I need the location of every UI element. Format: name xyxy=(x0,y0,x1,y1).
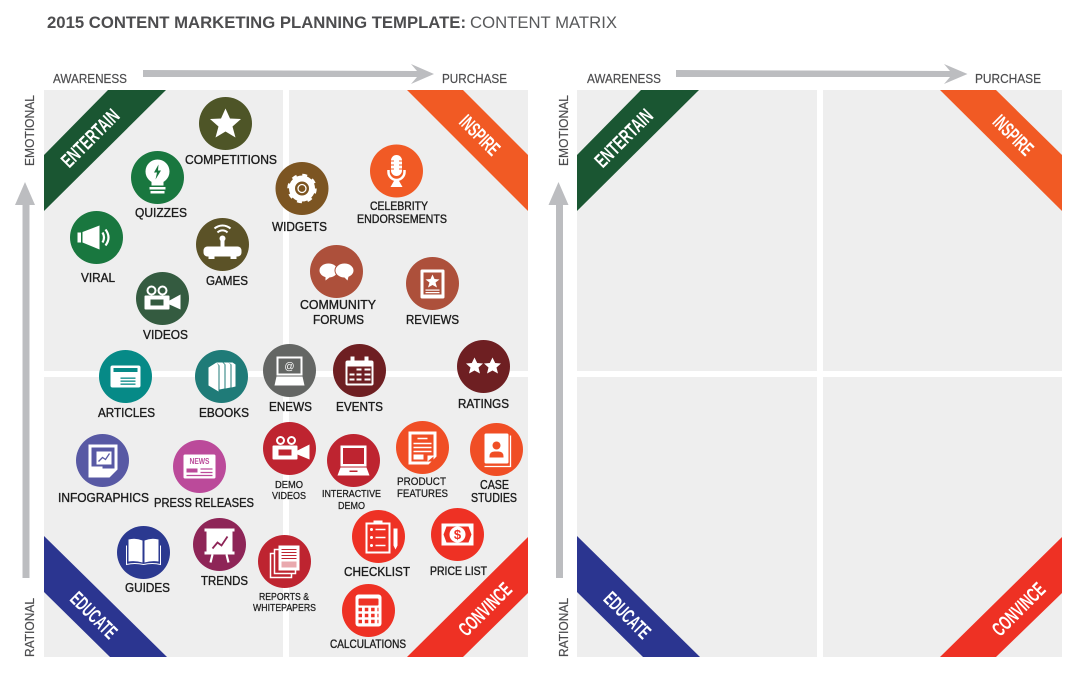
item: ratings xyxy=(457,340,510,411)
arrow: rational to emotional xyxy=(548,182,568,578)
icon: case file with person xyxy=(470,423,523,476)
icon: laptop xyxy=(327,434,380,487)
axis label: purchase: PURCHASE xyxy=(442,72,507,86)
ribbon: educate xyxy=(44,536,167,657)
ribbon: inspire xyxy=(940,90,1062,211)
ribbon: convince: CONVINCE xyxy=(988,579,1050,641)
label: DEMO xyxy=(275,480,303,491)
ribbon: inspire: INSPIRE xyxy=(988,111,1037,161)
label: DEMO xyxy=(338,501,365,512)
item: ebooks xyxy=(195,350,249,420)
quadrant: convince background xyxy=(289,377,528,657)
ribbon: entertain xyxy=(577,90,699,211)
label: COMPETITIONS xyxy=(185,153,277,167)
title: 2015 CONTENT MARKETING PLANNING TEMPLATE: xyxy=(47,13,466,32)
label: EVENTS xyxy=(336,400,383,414)
ribbon: educate xyxy=(577,536,700,657)
item: guides xyxy=(117,526,170,595)
icon: open book xyxy=(117,526,170,579)
icon: presentation board xyxy=(193,518,246,571)
ribbon: entertain xyxy=(44,90,166,211)
label: CALCULATIONS xyxy=(330,639,406,651)
quadrant: educate background xyxy=(44,377,283,657)
item: trends xyxy=(193,518,248,588)
ribbon: convince: CONVINCE xyxy=(455,579,517,641)
label xyxy=(253,592,316,614)
ribbon: convince xyxy=(407,537,528,657)
label xyxy=(397,476,448,500)
panel: blank content matrix xyxy=(548,64,1062,657)
ribbon: convince xyxy=(940,537,1062,657)
item: articles xyxy=(98,350,155,420)
quadrant: educate background xyxy=(577,377,817,657)
icon: tablet with star xyxy=(406,257,459,310)
quadrant: inspire background xyxy=(823,90,1062,371)
label: REPORTS & xyxy=(259,592,309,603)
ribbon: inspire xyxy=(407,90,528,211)
label: FORUMS xyxy=(313,313,364,327)
label xyxy=(272,480,306,502)
axis label: awareness: AWARENESS xyxy=(587,72,661,86)
axis label: emotional: EMOTIONAL xyxy=(557,95,571,166)
item: product features xyxy=(396,421,449,500)
panel: filled content matrix xyxy=(15,64,528,657)
ribbon: educate: EDUCATE xyxy=(599,588,655,644)
item: viral xyxy=(70,211,123,285)
label: GUIDES xyxy=(125,581,170,595)
label: WIDGETS xyxy=(272,220,327,234)
icon: light bulb xyxy=(131,151,184,204)
label: FEATURES xyxy=(397,488,448,500)
ribbon: educate: EDUCATE xyxy=(65,588,121,644)
icon: video camera xyxy=(136,272,189,325)
label: PRICE LIST xyxy=(430,564,488,578)
arrow: awareness to purchase xyxy=(676,64,968,84)
axis label: rational: RATIONAL xyxy=(557,598,571,657)
label: VIRAL xyxy=(81,271,115,285)
icon: two stars xyxy=(457,340,510,393)
icon: row of books xyxy=(195,350,248,403)
icon: microphone xyxy=(370,144,423,198)
item: interactive demo xyxy=(322,434,381,512)
label: WHITEPAPERS xyxy=(253,603,316,614)
item: calculations xyxy=(330,584,406,651)
ribbon: inspire: INSPIRE xyxy=(454,111,504,161)
label: ARTICLES xyxy=(98,406,155,420)
ribbon: entertain: ENTERTAIN xyxy=(591,105,658,172)
icon: dollar bill: $ xyxy=(454,527,462,542)
ribbon: entertain: ENTERTAIN xyxy=(57,105,124,172)
item: enews xyxy=(263,344,316,414)
label: TRENDS xyxy=(201,574,248,588)
item: games xyxy=(196,218,249,288)
icon: newspaper: NEWS xyxy=(190,457,210,466)
item: community forums xyxy=(300,245,377,327)
item: price list xyxy=(430,508,488,578)
label: VIDEOS xyxy=(143,328,188,342)
label: PRESS RELEASES xyxy=(154,496,254,510)
label: STUDIES xyxy=(471,491,517,505)
icon: stacked papers xyxy=(258,535,311,588)
arrow: awareness to purchase xyxy=(143,64,434,84)
label: COMMUNITY xyxy=(300,298,377,312)
label xyxy=(471,478,517,505)
label: INFOGRAPHICS xyxy=(58,491,149,505)
item: widgets xyxy=(272,162,328,234)
icon: document xyxy=(396,421,449,474)
item: celebrity endorsements xyxy=(357,144,447,226)
label: ENEWS xyxy=(269,400,312,414)
icon: clipboard xyxy=(352,510,405,563)
item: press releases xyxy=(154,440,254,510)
icon: star xyxy=(199,97,252,150)
item: demo videos xyxy=(263,422,316,502)
item: reports and whitepapers xyxy=(253,535,316,614)
label: EBOOKS xyxy=(199,406,249,420)
label: INTERACTIVE xyxy=(322,489,381,500)
item: videos xyxy=(136,272,189,342)
axis label: awareness: AWARENESS xyxy=(53,72,127,86)
icon: megaphone xyxy=(70,211,123,264)
item: infographics xyxy=(58,434,149,505)
icon: video camera xyxy=(263,422,316,475)
label: REVIEWS xyxy=(406,313,459,327)
label: PRODUCT xyxy=(397,476,446,488)
icon: speech bubbles xyxy=(310,245,363,298)
icon: web page xyxy=(99,350,152,403)
axis label: rational: RATIONAL xyxy=(23,598,37,657)
label: RATINGS xyxy=(458,397,509,411)
quadrant: inspire background xyxy=(289,90,528,371)
item: case studies xyxy=(470,423,523,505)
label xyxy=(300,298,377,327)
icon: calculator xyxy=(342,584,395,637)
item: checklist xyxy=(344,510,410,579)
item: competitions xyxy=(185,97,277,167)
icon: calendar xyxy=(333,344,386,397)
icon: game console xyxy=(196,218,249,271)
quadrant: entertain background xyxy=(44,90,283,371)
item: events xyxy=(333,344,386,414)
label: CASE xyxy=(480,478,509,492)
label xyxy=(322,489,381,512)
title: CONTENT MATRIX xyxy=(470,13,617,32)
item: quizzes xyxy=(131,151,187,220)
icon: laptop with at sign: @ xyxy=(284,362,295,372)
quadrant: entertain background xyxy=(577,90,817,371)
axis label: emotional: EMOTIONAL xyxy=(23,95,37,166)
label: QUIZZES xyxy=(135,206,187,220)
quadrant: convince background xyxy=(823,377,1062,657)
icon: gear xyxy=(276,162,328,215)
label: ENDORSEMENTS xyxy=(357,214,447,226)
label: CHECKLIST xyxy=(344,565,410,579)
icon: infographic sheet xyxy=(76,434,129,487)
label: GAMES xyxy=(206,274,248,288)
label: VIDEOS xyxy=(272,491,306,502)
axis label: purchase: PURCHASE xyxy=(975,72,1041,86)
item: reviews xyxy=(406,257,459,327)
arrow: rational to emotional xyxy=(15,182,35,578)
label xyxy=(357,201,447,226)
label: CELEBRITY xyxy=(370,201,428,213)
